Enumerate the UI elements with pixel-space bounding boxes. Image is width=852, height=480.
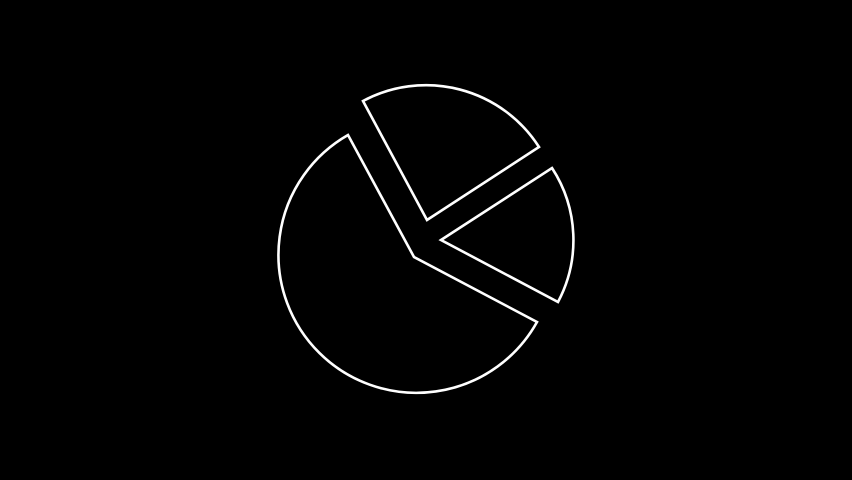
pie chart: three exploded slices	[278, 85, 573, 393]
slice: right	[441, 168, 573, 302]
slice: top	[363, 85, 539, 220]
slice: large	[278, 135, 537, 393]
